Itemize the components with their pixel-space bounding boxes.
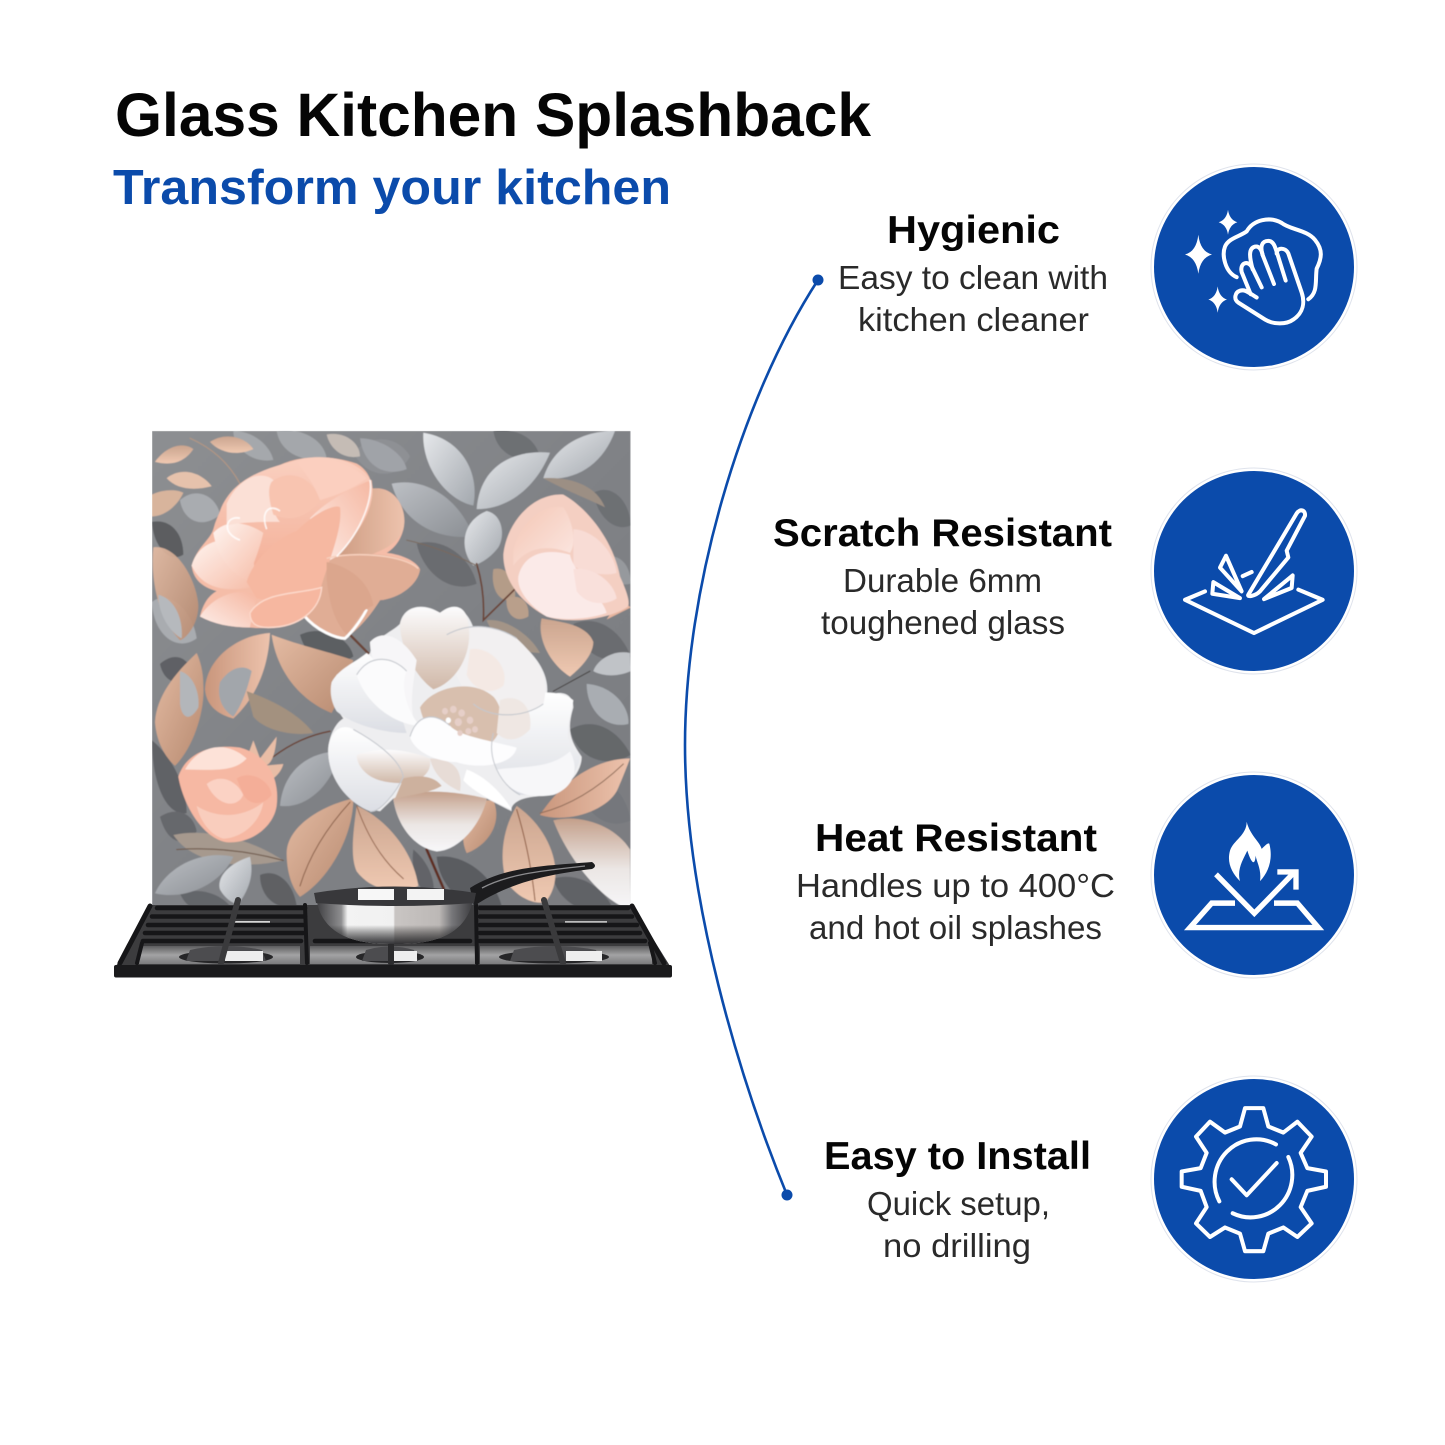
- feature text: Scratch Resistant: toughened glass: [821, 604, 1065, 641]
- icon: knife scratching glass: [1151, 468, 1357, 674]
- subtitle: Transform your kitchen: [113, 161, 671, 215]
- copper and tan leaves: [152, 436, 631, 910]
- feature text: Easy to Install: no drilling: [883, 1227, 1031, 1264]
- hob steel panels: [139, 946, 652, 964]
- feature text: Hygienic: kitchen cleaner: [858, 301, 1089, 338]
- large peach peony: [192, 457, 420, 638]
- pan rim: [314, 886, 476, 906]
- feature text: Easy to Install: Easy to Install: [824, 1135, 1091, 1178]
- floral splashback panel: [152, 430, 631, 919]
- product image: floral glass splashback above gas hob: [114, 430, 672, 978]
- feature text: Scratch Resistant: Durable 6mm: [843, 562, 1042, 599]
- feature text: Easy to Install: Quick setup,: [867, 1185, 1050, 1222]
- grates: [120, 900, 664, 963]
- feature text: Scratch Resistant: Scratch Resistant: [773, 512, 1112, 555]
- silver leaves: [155, 431, 631, 904]
- frying pan: [314, 862, 595, 944]
- pan handle: [470, 862, 595, 906]
- feature text: Scratch Resistant: [773, 512, 1112, 641]
- feature text: Hygienic: Hygienic: [887, 209, 1060, 252]
- hob front edge: [114, 965, 672, 978]
- right peach bud: [503, 495, 631, 620]
- feature text: Heat Resistant: and hot oil splashes: [809, 909, 1102, 946]
- white peony: [328, 607, 582, 851]
- burners: [179, 921, 609, 964]
- pan body: [316, 894, 474, 944]
- feature text: Hygienic: [838, 209, 1108, 338]
- icon: gear with check mark: [1151, 1076, 1357, 1282]
- gas hob: [114, 900, 672, 978]
- infographic canvas: [114, 92, 1358, 1282]
- background dark leaves: [152, 430, 631, 914]
- feature text: Heat Resistant: [796, 817, 1115, 946]
- feature text: Heat Resistant: Handles up to 400°C: [796, 867, 1115, 904]
- icon: flame deflected from surface: [1151, 772, 1357, 978]
- title: Glass Kitchen Splashback: [115, 81, 871, 149]
- feature text: Easy to Install: [824, 1135, 1091, 1264]
- feature text: Heat Resistant: Heat Resistant: [815, 817, 1097, 860]
- small peach peony: [178, 737, 283, 842]
- curved connector line: [685, 274, 824, 1200]
- stems and veins: [177, 438, 623, 900]
- feature text: Hygienic: Easy to clean with: [838, 259, 1108, 296]
- flower stamens: [442, 706, 478, 736]
- icon: hand wiping with sparkles: [1151, 164, 1357, 370]
